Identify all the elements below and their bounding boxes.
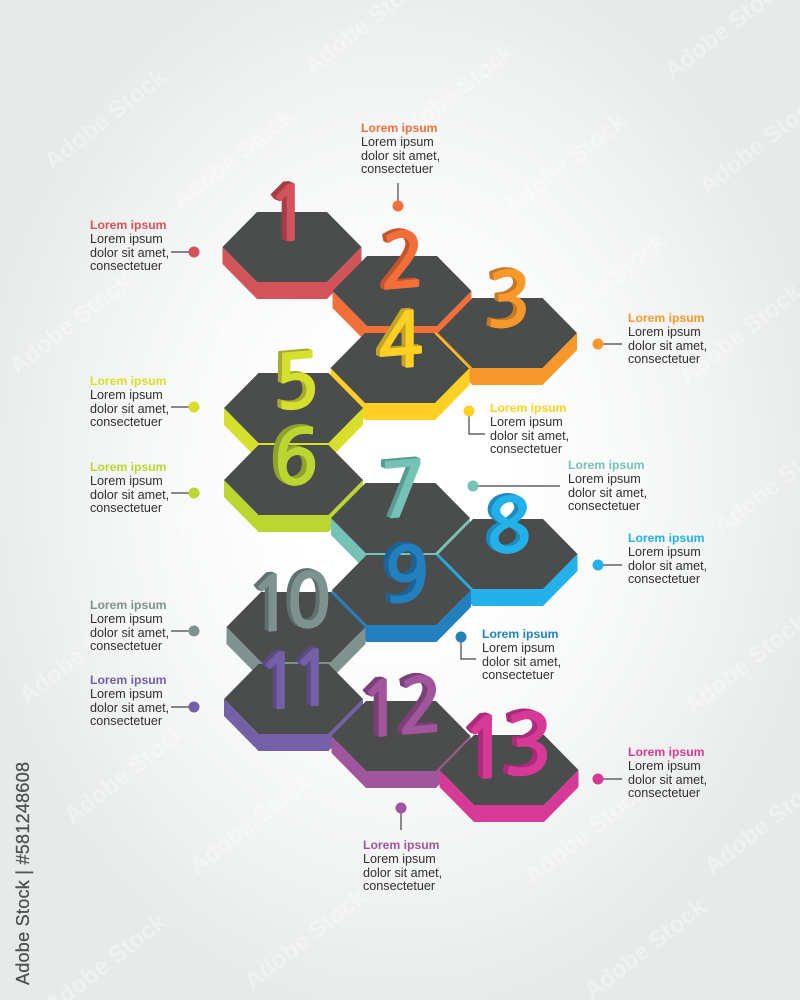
label 12 [363, 838, 442, 893]
label 7: Lorem ipsum [568, 472, 641, 486]
label 1: dolor sit amet, [90, 246, 169, 260]
label 13: Lorem ipsum [628, 745, 705, 759]
hexagon 3 [438, 298, 577, 385]
watermarks: Adobe Stock [499, 108, 632, 220]
label 10: Lorem ipsum [90, 612, 163, 626]
label 11: dolor sit amet, [90, 700, 169, 714]
number 2: 2 [380, 223, 426, 302]
label 5: consectetuer [90, 415, 162, 429]
hexagon 5 [224, 373, 363, 460]
label 12: dolor sit amet, [363, 866, 442, 880]
label 11 [90, 673, 169, 728]
label 8: dolor sit amet, [628, 558, 707, 572]
label 6: Lorem ipsum [90, 460, 167, 474]
label 3: Lorem ipsum [628, 325, 701, 339]
label 13: Lorem ipsum [628, 759, 701, 773]
label 9: consectetuer [482, 668, 554, 682]
number 1: 1 [266, 176, 312, 255]
watermarks: Adobe Stock [59, 718, 192, 830]
label 2 [361, 121, 440, 176]
label 4 [490, 401, 569, 456]
label 2: Lorem ipsum [361, 135, 434, 149]
label 5: dolor sit amet, [90, 402, 169, 416]
connector 13 [592, 774, 622, 784]
label 1: Lorem ipsum [90, 232, 163, 246]
number 5: 5 [274, 344, 320, 423]
label 12: consectetuer [363, 879, 435, 893]
label 1: Lorem ipsum [90, 218, 167, 232]
label 9: Lorem ipsum [482, 627, 559, 641]
label 4: Lorem ipsum [490, 401, 567, 415]
label 6 [90, 460, 169, 515]
number 9: 9 [384, 537, 430, 616]
label 10: consectetuer [90, 639, 162, 653]
watermarks: Adobe Stock [239, 883, 372, 995]
label 6: consectetuer [90, 501, 162, 515]
label 8: Lorem ipsum [628, 531, 705, 545]
connector 5 [171, 402, 200, 412]
label 6: Lorem ipsum [90, 474, 163, 488]
label 13 [628, 745, 707, 800]
label 11: Lorem ipsum [90, 687, 163, 701]
label 6: dolor sit amet, [90, 488, 169, 502]
label 11: Lorem ipsum [90, 673, 167, 687]
label 10: Lorem ipsum [90, 598, 167, 612]
connector 10 [171, 626, 200, 636]
label 1: consectetuer [90, 259, 162, 273]
label 9 [482, 627, 561, 682]
watermarks: Adobe Stock [39, 63, 172, 175]
connector 3 [592, 338, 622, 350]
label 8: Lorem ipsum [628, 545, 701, 559]
label 7: consectetuer [568, 499, 640, 513]
number 6: 6 [273, 420, 319, 499]
hexagon 11 [224, 664, 363, 751]
label 12: Lorem ipsum [363, 852, 436, 866]
hexagon 12 [332, 701, 470, 788]
number 3: 3 [486, 262, 532, 341]
label 4: Lorem ipsum [490, 415, 563, 429]
label 10 [90, 598, 169, 653]
connector 4 [464, 406, 485, 434]
connector 6 [171, 488, 200, 498]
number 13: 13 [460, 702, 546, 794]
label 4: consectetuer [490, 442, 562, 456]
hexagon 10 [226, 592, 366, 679]
label 5: Lorem ipsum [90, 388, 163, 402]
label 2: Lorem ipsum [361, 121, 438, 135]
hexagon 1 [222, 212, 362, 299]
number 10: 10 [248, 564, 324, 645]
stock id: Adobe Stock | #581248608 [13, 762, 33, 985]
label 13: dolor sit amet, [628, 772, 707, 786]
label 9: Lorem ipsum [482, 641, 555, 655]
label 3 [628, 311, 707, 366]
connector 1 [171, 246, 200, 258]
watermarks: Adobe Stock [14, 598, 147, 710]
label 10: dolor sit amet, [90, 626, 169, 640]
label 12: Lorem ipsum [363, 838, 440, 852]
watermarks: Adobe Stock [539, 228, 672, 340]
label 2: dolor sit amet, [361, 148, 440, 162]
label 13: consectetuer [628, 786, 700, 800]
connector 12 [396, 802, 406, 830]
hexagon 9 [332, 555, 471, 642]
label 4: dolor sit amet, [490, 428, 569, 442]
label 3: dolor sit amet, [628, 338, 707, 352]
label 7: dolor sit amet, [568, 486, 647, 500]
watermarks: Adobe Stock [209, 233, 342, 345]
number 11: 11 [256, 642, 324, 723]
label 8: consectetuer [628, 572, 700, 586]
hexagon 2 [332, 256, 472, 343]
connector 7 [468, 480, 560, 492]
watermarks: Adobe Stock [167, 103, 300, 215]
label 7: Lorem ipsum [568, 458, 645, 472]
hexagon 13 [440, 735, 578, 822]
label 11: consectetuer [90, 714, 162, 728]
label 9: dolor sit amet, [482, 654, 561, 668]
number 8: 8 [486, 488, 532, 567]
connector 11 [171, 702, 200, 712]
connector 8 [592, 560, 622, 570]
connector 9 [456, 632, 476, 659]
label 7 [568, 458, 647, 513]
label 5 [90, 374, 169, 429]
watermarks: Adobe Stock [169, 428, 302, 540]
label 8 [628, 531, 707, 586]
label 5: Lorem ipsum [90, 374, 167, 388]
connector 2 [392, 183, 404, 212]
hexagon 7 [331, 483, 470, 570]
watermarks: Adobe Stock [519, 778, 652, 890]
number 7: 7 [380, 452, 426, 531]
hexagon 4 [330, 333, 470, 420]
watermarks: Adobe Stock [184, 768, 317, 880]
label 3: Lorem ipsum [628, 311, 705, 325]
label 3: consectetuer [628, 352, 700, 366]
number 4: 4 [378, 303, 424, 382]
watermarks: Adobe Stock [387, 38, 520, 150]
label 1 [90, 218, 169, 273]
hexagon 6 [224, 445, 363, 532]
number 12: 12 [358, 668, 438, 751]
label 2: consectetuer [361, 162, 433, 176]
watermarks: Adobe Stock [4, 268, 137, 380]
hexagon 8 [438, 519, 578, 606]
